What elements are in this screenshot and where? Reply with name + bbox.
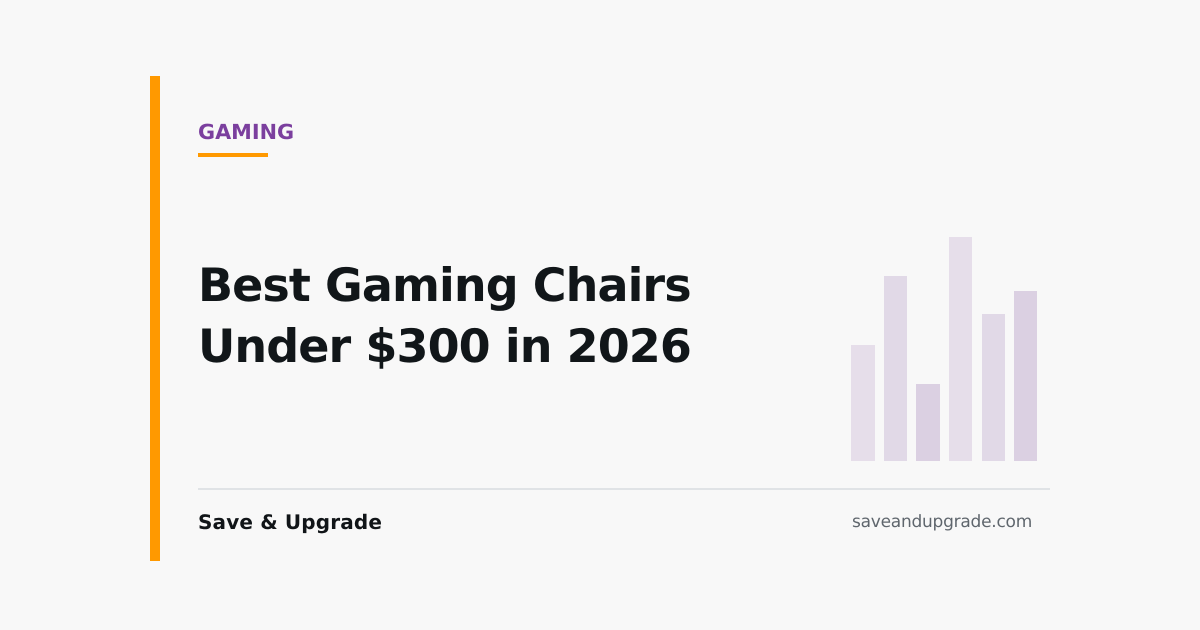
orange accent bar — [150, 76, 160, 561]
website url: saveandupgrade.com — [852, 512, 1032, 532]
title: Under $300 in 2026 — [198, 319, 691, 373]
category underline — [198, 153, 268, 157]
category label: GAMING — [198, 120, 294, 144]
bar chart decoration — [851, 237, 1037, 461]
title — [198, 258, 691, 373]
brand name: Save & Upgrade — [198, 510, 382, 534]
title: Best Gaming Chairs — [198, 258, 691, 312]
